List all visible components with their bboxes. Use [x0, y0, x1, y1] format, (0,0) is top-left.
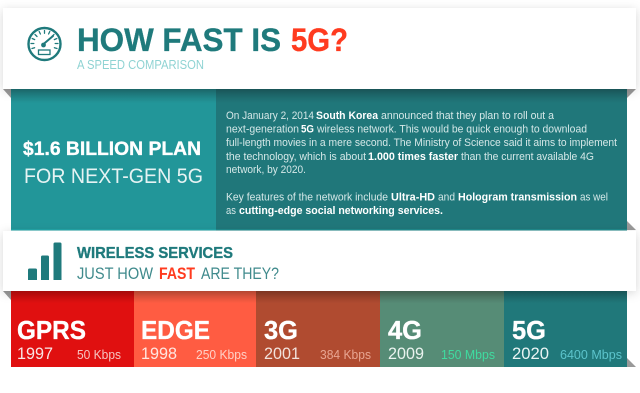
bar: 4G: [380, 291, 504, 367]
title: 5G?: [291, 22, 348, 58]
panel: title header: [3, 8, 636, 89]
icon: signal bars: [28, 242, 62, 280]
plan subheading: FOR NEXT-GEN 5G: [24, 165, 203, 188]
bar: 3G: 3G: [264, 315, 298, 345]
panel: plan description text: 1.000 times faster: [368, 151, 459, 163]
section subheading: [77, 264, 279, 283]
bar: 4G: 4G: [388, 315, 422, 345]
panel: speed bars: [11, 291, 627, 367]
panel: plan description text: announced that they plan to roll out a: [381, 110, 554, 122]
panel: plan description text: Ultra-HD: [391, 192, 435, 204]
bar: 5G: 5G: [512, 315, 546, 345]
title: HOW FAST IS: [77, 22, 281, 58]
section subheading: FAST: [159, 264, 196, 283]
panel: plan description text: South Korea: [316, 110, 379, 122]
bar: GPRS: 50 Kbps: [77, 348, 121, 362]
bar: 4G: 150 Mbps: [441, 348, 495, 362]
bar: 3G: [256, 291, 380, 367]
bar: 5G: 6400 Mbps: [560, 348, 622, 362]
bar: 5G: [504, 291, 627, 367]
bar: 4G: 2009: [388, 344, 424, 363]
panel: plan description text: cutting-edge social networking services.: [239, 205, 443, 217]
panel: plan description text: network, by 2020.: [226, 164, 306, 176]
panel: plan description text: the technology, which is about: [226, 151, 366, 163]
bar: 5G: 2020: [512, 344, 549, 363]
panel: plan description text: as wel: [580, 192, 608, 204]
panel: plan description text: [216, 89, 627, 230]
bar: 3G: 2001: [264, 344, 300, 363]
panel: plan description text: On January 2, 2014: [226, 110, 314, 122]
panel: plan description text: than the current available 4G: [461, 151, 594, 163]
bar: 3G: 384 Kbps: [320, 348, 371, 362]
fold corners: [3, 89, 636, 367]
section heading: WIRELESS SERVICES: [77, 245, 233, 262]
panel: plan headline block: [11, 89, 216, 230]
bar: EDGE: EDGE: [141, 315, 210, 345]
panel: wireless services header: [3, 231, 636, 291]
subtitle: A SPEED COMPARISON: [77, 57, 204, 72]
panel: plan description text: Hologram transmission: [458, 192, 577, 204]
bar: EDGE: 1998: [141, 344, 177, 363]
icon: speedometer: [28, 28, 60, 60]
panel: speed plan: [11, 89, 627, 230]
bar: EDGE: [134, 291, 256, 367]
panel: plan description text: next-generation: [226, 124, 299, 136]
bar: EDGE: 250 Kbps: [196, 348, 247, 362]
panel: plan description text: wireless network. This would be quick enough to download: [316, 124, 587, 136]
section subheading: ARE THEY?: [201, 264, 279, 283]
panel: plan description text: 5G: [301, 124, 314, 136]
bar: GPRS: 1997: [17, 344, 53, 363]
plan amount heading: $1.6 BILLION PLAN: [23, 139, 201, 160]
panel: plan description text: full-length movies in a mere second. The Ministry of Science said it aims to implement: [226, 137, 617, 149]
panel: plan description text: Key features of the network include: [226, 192, 388, 204]
bar: GPRS: GPRS: [17, 315, 86, 345]
panel: plan description text: and: [438, 192, 455, 204]
section subheading: JUST HOW: [77, 264, 153, 283]
bar: GPRS: [11, 291, 134, 367]
panel: plan description text: as: [226, 205, 237, 217]
